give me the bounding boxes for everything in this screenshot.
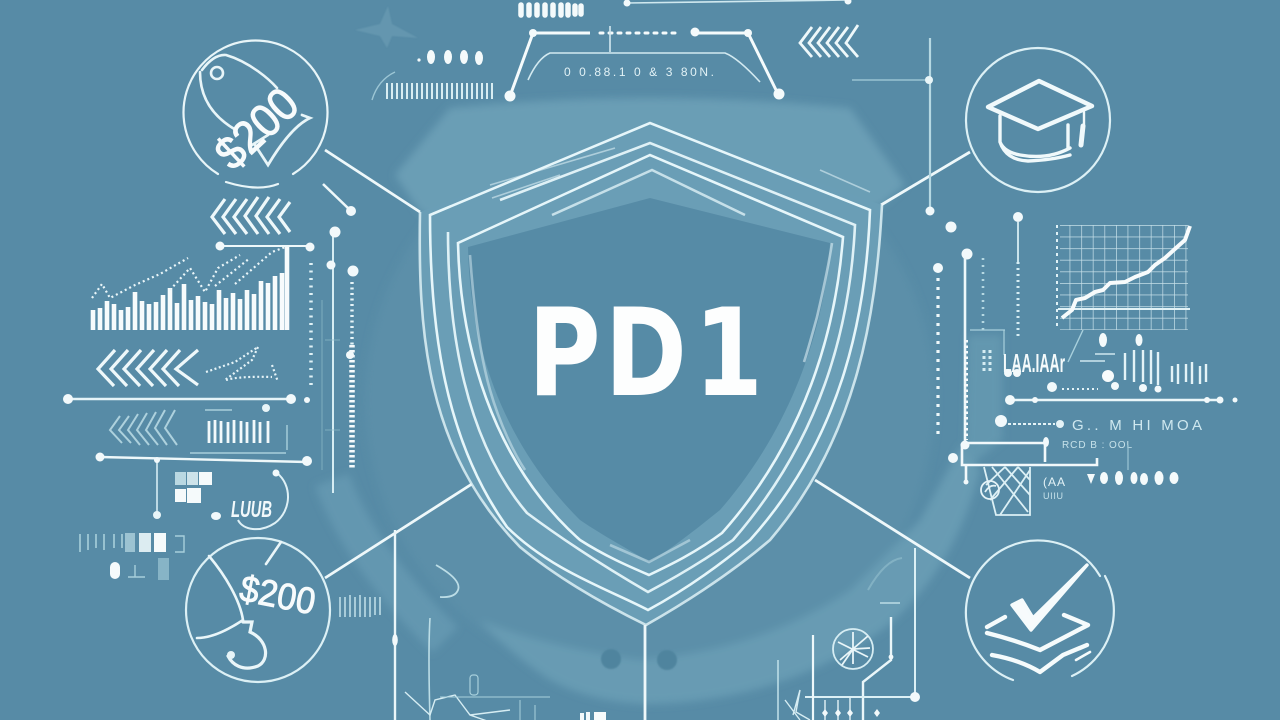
right box and net: RCD B : OOL [1062, 440, 1132, 451]
fan [833, 629, 873, 669]
right side patch [965, 335, 1002, 470]
left arc label: LUUB [231, 496, 272, 522]
dial lines [197, 542, 281, 638]
left vertical dashed columns [311, 184, 358, 493]
ring [186, 538, 330, 682]
left horizontal line one [63, 394, 310, 412]
vertical stem below shield [644, 625, 646, 720]
top barcode [372, 72, 492, 100]
top right vertical line [852, 38, 956, 232]
right petal dots [1087, 471, 1178, 485]
shield [420, 123, 882, 625]
ring [966, 48, 1110, 192]
left middle chevrons [98, 350, 198, 386]
faint star [355, 6, 418, 48]
wire [863, 617, 891, 720]
dotted trend [92, 246, 288, 298]
bottom white tabs [580, 712, 606, 720]
right faded label row: G.. M HI MOA [1072, 417, 1202, 434]
tassel [1083, 112, 1085, 126]
bottom right circuit [778, 548, 920, 720]
top right chevrons [800, 25, 858, 57]
left ring band [332, 480, 445, 640]
left horizontal line two [96, 452, 312, 519]
price label: $200 [204, 77, 309, 179]
top cap [395, 98, 905, 300]
checkmark [1012, 565, 1087, 630]
price label: $200 [236, 568, 319, 622]
ring [966, 540, 1114, 680]
bottom left circuit [340, 530, 550, 720]
left dotted squiggle [206, 347, 278, 382]
left square blocks [175, 472, 212, 503]
left top chevrons [212, 197, 290, 234]
right box and net: UIIU [1043, 491, 1063, 501]
mid disc [365, 115, 935, 685]
right box and net: (AA [1043, 475, 1065, 489]
background ring [332, 98, 1002, 704]
bars [93, 247, 287, 330]
top dots row [417, 50, 483, 65]
cap board [988, 81, 1092, 129]
shield inner panel [468, 198, 830, 562]
grid [1060, 225, 1188, 330]
shield outlines [420, 123, 882, 625]
cap base [1000, 116, 1070, 161]
top bracket: 0 0.88.1 0 & 3 80N. [564, 65, 714, 79]
top bracket [504, 26, 784, 102]
left bar chart [92, 242, 314, 330]
left small bars [190, 410, 287, 453]
top bracket line [220, 245, 310, 247]
right box and net [948, 437, 1132, 515]
ball [981, 481, 999, 499]
shield band fill [420, 123, 882, 625]
connector lines [325, 150, 970, 578]
net [984, 467, 1030, 515]
top pills [521, 5, 581, 15]
icon: dollar dial circle [186, 538, 330, 682]
right chart label: LAA.IAAr [1003, 348, 1065, 378]
lower right crescent [480, 445, 980, 704]
tag outline [200, 55, 277, 130]
icon: check and book circle [966, 540, 1114, 680]
right mid bars and dots [1047, 333, 1206, 392]
trend line [1062, 226, 1190, 318]
dark dots under shield [601, 649, 677, 670]
right faded label row [995, 415, 1202, 434]
lower left blocks [80, 533, 184, 580]
right chart label [984, 330, 1083, 378]
right vertical columns [933, 212, 1023, 445]
icon: price tag circle [184, 41, 328, 188]
ring [184, 41, 328, 188]
right line chart [1057, 225, 1190, 330]
icon: graduation cap circle [966, 48, 1110, 192]
title: PD1: PD1 [528, 283, 763, 425]
left arc label [211, 470, 288, 529]
right horizontal line [1005, 395, 1238, 405]
book lines [987, 615, 1088, 650]
left faint chevrons [110, 410, 177, 445]
top line [624, 0, 852, 6]
